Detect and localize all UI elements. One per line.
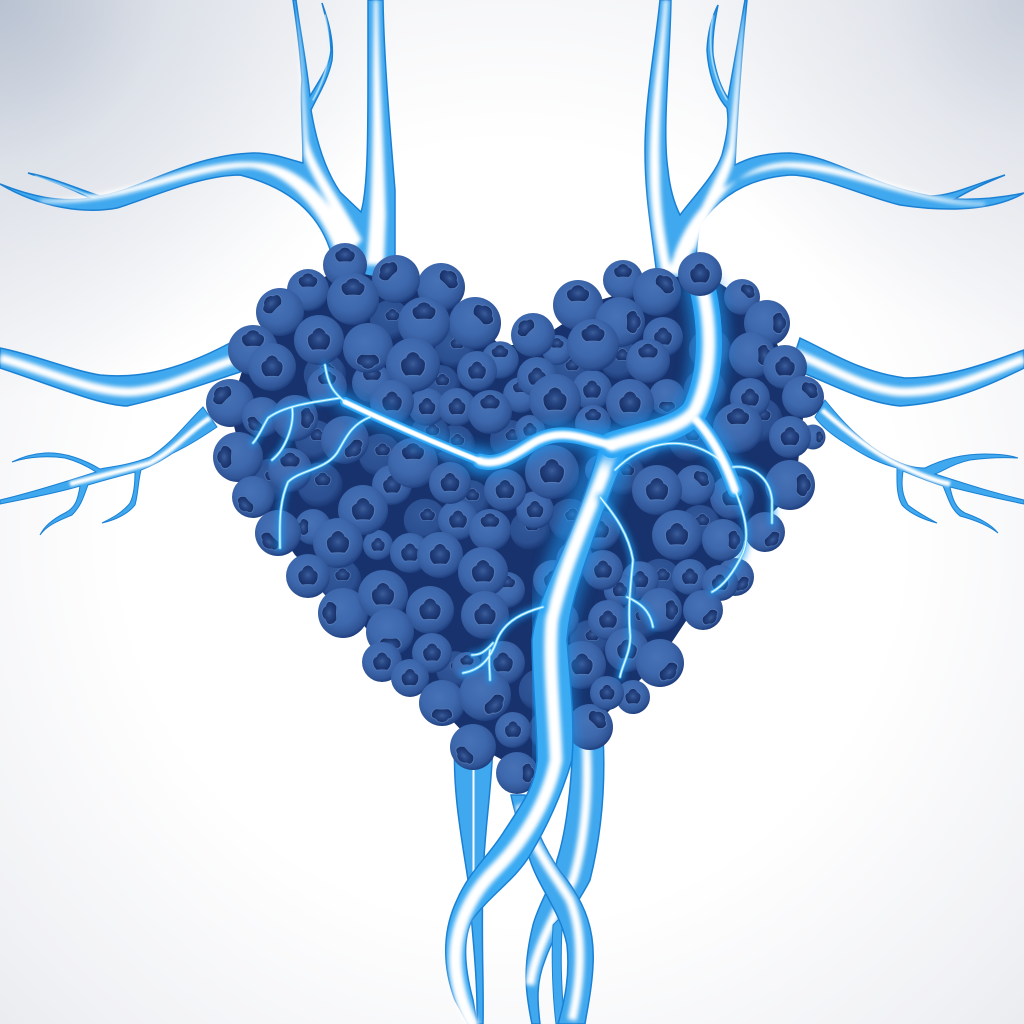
vein: upper left branching vessel (0, 0, 395, 278)
vein: left lower vessel with twigs (0, 407, 217, 535)
blueberries forming the heart (206, 243, 826, 794)
berry on top of right vessel (678, 252, 722, 296)
vein: lower left strand (454, 740, 493, 1024)
vein: upper right branching vessel (645, 0, 1024, 285)
vein: main trunk running through the heart (446, 445, 630, 1024)
vein: left middle vessel (0, 343, 240, 406)
heart base shadow (230, 270, 805, 775)
vein: right lower vessel with twigs (815, 400, 1024, 533)
vein: glowing branches over the berries (253, 290, 772, 680)
vein: right middle vessel (790, 338, 1024, 406)
vein: crossing strand (511, 795, 593, 1024)
vein: lower right strand (526, 735, 604, 1024)
